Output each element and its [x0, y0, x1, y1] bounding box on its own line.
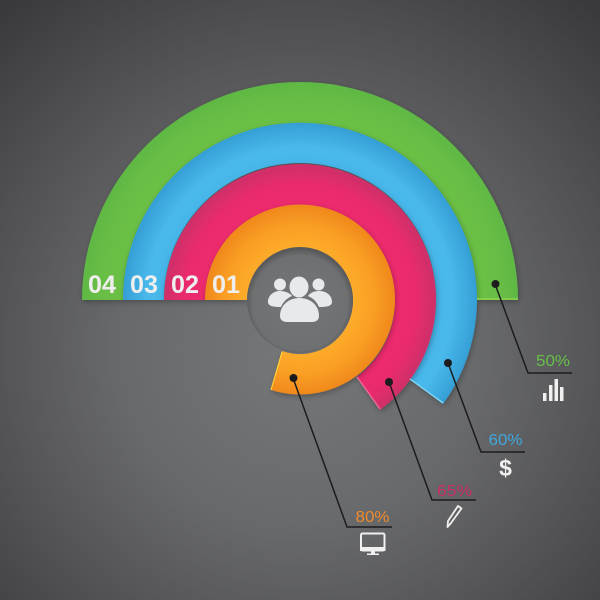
icon: bar chart: [543, 379, 564, 401]
ring numbers: 03: [130, 271, 158, 299]
icon: dollar sign: $: [499, 455, 512, 481]
callout: pink 65%: [385, 378, 476, 500]
ring 04: green: [82, 82, 518, 300]
ring 02: pink: [164, 164, 436, 410]
callout: blue 60%: [444, 359, 525, 452]
centre hole: [247, 247, 353, 353]
callout: green 50%: [492, 280, 572, 373]
callout: pink 65%: 65%: [437, 483, 472, 500]
icon: pencil: [448, 506, 462, 527]
ring end highlights: [271, 299, 518, 409]
callout: green 50%: 50%: [536, 353, 570, 370]
ring numbers: 01: [212, 271, 240, 299]
ring numbers: 04: [88, 271, 116, 299]
icon: people group: [268, 276, 332, 322]
callout: blue 60%: 60%: [488, 432, 522, 449]
ring numbers: [88, 271, 240, 299]
callout: orange 80%: [290, 374, 392, 527]
ring 01: orange: [205, 205, 395, 395]
icon: monitor: [360, 534, 386, 555]
ring 03: blue: [123, 123, 477, 404]
callout: orange 80%: 80%: [356, 509, 390, 526]
ring numbers: 02: [171, 271, 199, 299]
